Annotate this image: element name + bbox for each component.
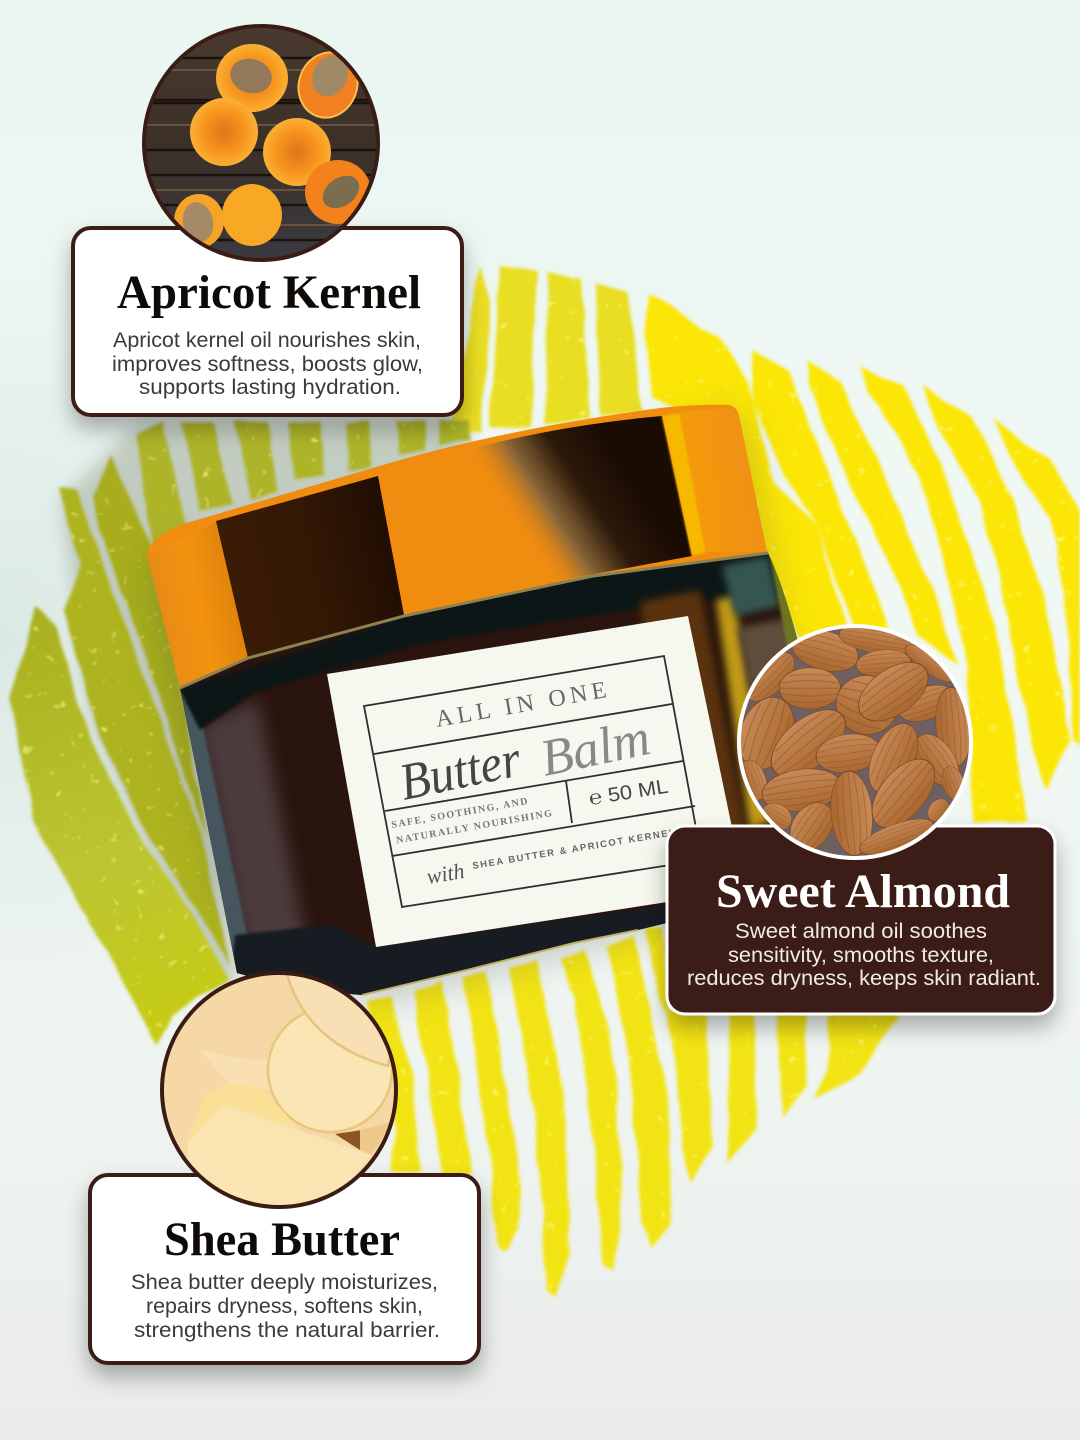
panel: sweet almond [667, 620, 1055, 1014]
heading: Sweet Almond [716, 865, 1010, 918]
brown gap [335, 1130, 362, 1150]
label grid [364, 656, 702, 907]
label: ingredient line: SHEA BUTTER & APRICOT KERNEL [472, 827, 676, 872]
label: tagline: NATURALLY NOURISHING [395, 808, 553, 846]
heading: Shea Butter [164, 1213, 400, 1266]
left lower streaks [10, 455, 230, 1047]
card [90, 1175, 479, 1363]
label: butter: Butter [395, 730, 527, 812]
left upper streaks [137, 420, 470, 580]
right olive edge [769, 556, 798, 646]
lid rim [180, 553, 768, 688]
right grey strip [734, 616, 788, 696]
label paper [327, 616, 745, 947]
label: volume: ℮ 50 ML [587, 776, 670, 810]
upper middle streaks [450, 265, 642, 432]
label: all in one: ALL IN ONE [434, 677, 608, 733]
streak shadow area [60, 418, 480, 985]
label: balm: Balm [536, 709, 655, 788]
body base band [232, 904, 666, 995]
description: Apricot kernel oil nourishes skin, [113, 328, 421, 352]
panel: apricot kernel [73, 20, 462, 415]
card [73, 228, 462, 415]
jar lid [147, 405, 767, 687]
icon: apricot photo [140, 20, 385, 265]
description [131, 1270, 440, 1342]
wedge [188, 1105, 372, 1205]
crumbled texture [200, 1050, 270, 1090]
right gold reflection [716, 596, 772, 830]
panel: shea butter [90, 965, 479, 1363]
body left edge [180, 690, 248, 976]
right amber area [636, 586, 746, 824]
card [667, 826, 1055, 1014]
description: repairs dryness, softens skin, [146, 1294, 423, 1318]
icon: shea butter photo [160, 971, 398, 1209]
yellow balm swatch [10, 265, 1080, 1297]
description: Shea butter deeply moisturizes, [131, 1270, 438, 1294]
description [687, 919, 1041, 990]
description: supports lasting hydration. [139, 375, 401, 399]
description: sensitivity, smooths texture, [728, 943, 994, 967]
jar body [180, 553, 798, 995]
jar base rim [362, 930, 638, 995]
description: Sweet almond oil soothes [735, 919, 987, 943]
jar label [327, 616, 745, 947]
description: strengthens the natural barrier. [134, 1318, 440, 1342]
icon: almond photo [729, 620, 980, 862]
body top band [180, 553, 790, 730]
description: reduces dryness, keeps skin radiant. [687, 966, 1041, 990]
description [112, 328, 423, 399]
jar [147, 405, 830, 1010]
disc [268, 1008, 392, 1132]
jar shadow [150, 415, 790, 1000]
heading: Apricot Kernel [117, 266, 421, 319]
label: with: with [425, 858, 466, 889]
top disc [286, 975, 390, 1068]
label: tagline: SAFE, SOOTHING, AND [391, 796, 528, 831]
bottom streaks [367, 930, 903, 1297]
upper right streaks [643, 293, 1080, 822]
description: improves softness, boosts glow, [112, 352, 423, 376]
right teal top [722, 556, 780, 616]
chip [186, 1083, 300, 1143]
body left reflection [203, 698, 308, 934]
